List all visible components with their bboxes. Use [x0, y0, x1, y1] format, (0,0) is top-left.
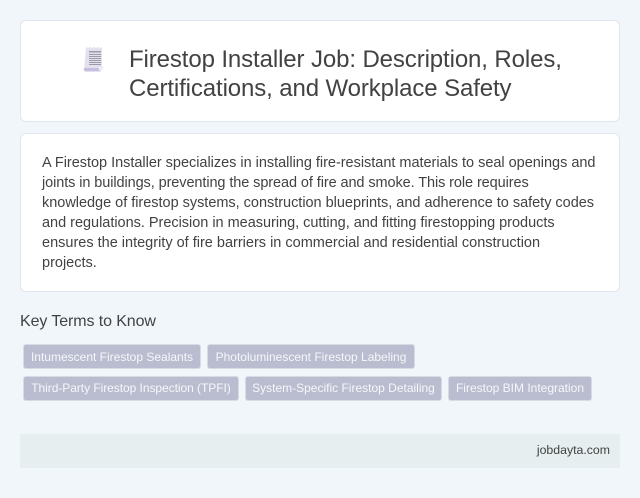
tag — [448, 376, 592, 401]
title card — [20, 20, 620, 122]
tag list — [23, 344, 592, 401]
heading: Firestop Installer Job: Description, Roles, — [129, 46, 562, 73]
panel: description — [20, 133, 620, 292]
tag: Firestop BIM Integration — [456, 381, 584, 395]
tag: Intumescent Firestop Sealants — [31, 350, 193, 364]
text block: description — [42, 155, 595, 271]
tag — [207, 344, 415, 369]
footer text: jobdayta.com — [537, 443, 610, 457]
text block: description: knowledge of firestop systems, construction blueprints, and adherence to safety codes — [42, 195, 594, 211]
heading — [129, 46, 562, 102]
text block: description: and regulations. Precision in measuring, cutting, and fitting firestopping products — [42, 215, 555, 231]
tag: System-Specific Firestop Detailing — [252, 381, 435, 395]
icon: document scroll — [84, 47, 104, 72]
footer bar — [20, 434, 620, 468]
tag — [245, 376, 442, 401]
tag: Third-Party Firestop Inspection (TPFI) — [31, 381, 231, 395]
tag — [23, 344, 201, 369]
text block: description: A Firestop Installer specializes in installing fire-resistant materials to seal openings and — [42, 155, 595, 171]
text block: description: ensures the integrity of fire barriers in commercial and residential construction — [42, 235, 540, 251]
text block: description: projects. — [42, 255, 97, 271]
heading: key terms: Key Terms to Know — [20, 313, 156, 330]
tag — [23, 376, 239, 401]
tag: Photoluminescent Firestop Labeling — [216, 350, 406, 364]
heading: Certifications, and Workplace Safety — [129, 75, 511, 102]
text block: description: joints in buildings, preventing the spread of fire and smoke. This role requires — [42, 175, 529, 191]
